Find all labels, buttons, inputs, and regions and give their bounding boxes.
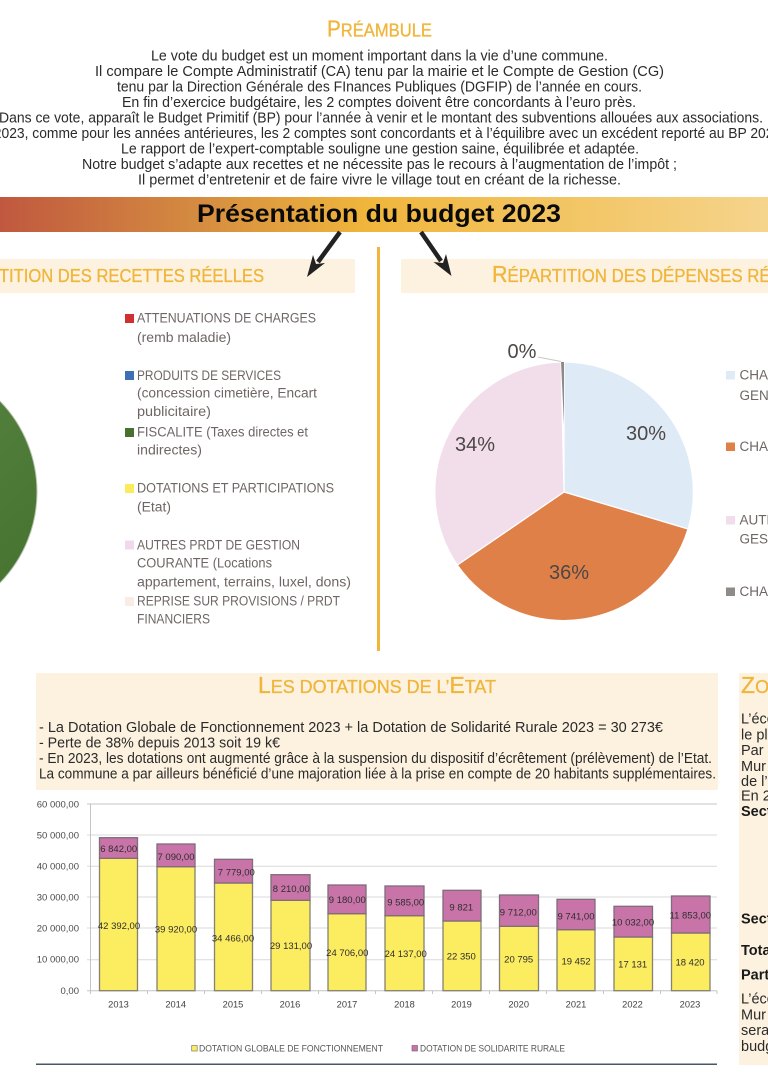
text block: préambule: Le rapport de l’expert-comptable souligne une gestion saine, équilibrée et adaptée. — [121, 140, 639, 158]
panel: zone (cropped right) — [739, 672, 768, 1065]
y axis and grid — [87, 804, 717, 994]
values: fonctionnement: 24 137,00 — [385, 949, 427, 960]
values: fonctionnement: 42 392,00 — [98, 921, 140, 932]
slice: 34% — [435, 362, 564, 565]
x axis labels: 2023 — [680, 1000, 700, 1010]
legend item: reprise sur provisions: REPRISE SUR PROVISIONS / PRDT — [137, 594, 340, 608]
banner: présentation du budget: Présentation du budget 2023 — [197, 200, 561, 228]
pie chart: recettes — [0, 362, 37, 622]
x axis labels: 2013 — [108, 1000, 129, 1010]
values: fonctionnement: 39 920,00 — [155, 925, 197, 936]
value: 36%: 36% — [549, 562, 589, 584]
chart legend: DOTATION DE SOLIDARITE RURALE — [420, 1043, 565, 1053]
legend item: reprise sur provisions: FINANCIERS — [137, 612, 210, 626]
legend item: produits de services: (concession cimetière, Encart — [137, 386, 317, 400]
bars: dotation globale de fonctionnement — [100, 858, 710, 991]
x axis labels: 2015 — [223, 1000, 243, 1010]
legend item: atténuations — [125, 310, 316, 345]
value: 30%: 30% — [626, 423, 666, 445]
slice: 0% — [561, 362, 564, 425]
values: fonctionnement: 17 131 — [618, 960, 647, 971]
y axis labels: 30 000,00 — [37, 892, 79, 904]
text block: dotations: - La Dotation Globale de Fonctionnement 2023 + la Dotation de Solidarité Rurale 2023 = 30 273€ — [39, 719, 664, 736]
x axis labels: 2014 — [165, 1000, 186, 1010]
bar chart: dotations 2013-2023 — [37, 800, 717, 1053]
panel: recettes heading — [0, 259, 355, 293]
y axis labels: 60 000,00 — [37, 800, 79, 810]
legend: dépenses — [726, 368, 768, 599]
text block: dotations — [39, 719, 716, 782]
text block: préambule — [0, 48, 768, 188]
text block: dotations: - En 2023, les dotations ont augmenté grâce à la suspension du dispositif d’écrêtement (prélèvement) de l’Etat. — [39, 750, 712, 767]
x axis labels: 2019 — [451, 1000, 472, 1010]
x axis labels: 2021 — [566, 1000, 586, 1010]
y axis labels: 40 000,00 — [37, 862, 79, 872]
values: fonctionnement: 18 420 — [675, 958, 705, 969]
banner: présentation du budget — [0, 197, 768, 232]
legend: recettes — [125, 310, 351, 626]
legend item: produits de services: publicitaire) — [137, 404, 211, 419]
legend item: dotations: (Etat) — [137, 500, 171, 514]
x axis labels — [108, 1000, 700, 1010]
pie chart: dépenses — [435, 341, 693, 620]
x axis labels: 2020 — [508, 1000, 529, 1010]
x axis labels: 2018 — [394, 1000, 415, 1010]
values: fonctionnement: 29 131,00 — [270, 941, 312, 952]
values: solidarité rurale — [100, 844, 711, 929]
chart legend: DOTATION GLOBALE DE FONCTIONNEMENT — [199, 1043, 383, 1053]
text block: préambule: tenu par la Direction Générale des FInances Publiques (DGFIP) de l’année en cours. — [117, 78, 642, 96]
values: solidarité rurale: 6 842,00 — [100, 844, 137, 855]
values: solidarité rurale: 7 779,00 — [218, 868, 255, 879]
values: solidarité rurale: 11 853,00 — [670, 910, 711, 921]
text block: préambule: En fin d’exercice budgétaire, les 2 comptes doivent être concordants à l’euro près. — [122, 94, 636, 111]
legend item: autres produits: AUTRES PRDT DE GESTION — [137, 538, 300, 552]
values: fonctionnement: 24 706,00 — [326, 948, 368, 959]
text block: préambule: Il permet d’entretenir et de faire vivre le village tout en créant de la richesse. — [138, 172, 621, 188]
x axis labels: 2022 — [622, 1000, 643, 1010]
x axis labels: 2016 — [280, 1000, 300, 1010]
values: solidarité rurale: 7 090,00 — [158, 852, 194, 863]
text block: préambule: Notre budget s’adapte aux recettes et ne nécessite pas le recours à l’augmentation de l’impôt ; — [82, 156, 677, 173]
legend item: autres produits: COURANTE (Locations — [137, 556, 272, 570]
values: solidarité rurale: 9 712,00 — [500, 907, 537, 918]
values: solidarité rurale: 10 032,00 — [612, 918, 654, 929]
heading: préambule: PRÉAMBULE — [327, 16, 432, 42]
value: 0%: 0% — [508, 341, 537, 363]
text block: zone: de l’ — [741, 774, 768, 790]
values: fonctionnement: 34 466,00 — [212, 933, 254, 944]
arrow: to recettes — [307, 232, 340, 277]
values: fonctionnement — [98, 921, 705, 971]
y axis labels: 20 000,00 — [37, 924, 79, 934]
bottom rule — [36, 1064, 717, 1065]
x axis labels: 2017 — [337, 1000, 357, 1010]
legend item: atténuations: ATTENUATIONS DE CHARGES — [137, 310, 316, 326]
y axis labels: 10 000,00 — [37, 954, 79, 966]
text block: zone: Mur — [741, 759, 766, 775]
vertical divider — [377, 247, 380, 651]
legend item: dotations: DOTATIONS ET PARTICIPATIONS — [137, 480, 334, 496]
legend item: autres produits — [125, 538, 351, 590]
value: 34%: 34% — [455, 434, 495, 456]
slice: 36% — [457, 492, 688, 620]
heading: les dotations: LES DOTATIONS DE L’ETAT — [258, 672, 496, 698]
values: fonctionnement: 19 452 — [561, 957, 591, 968]
text block: préambule: Il compare le Compte Administratif (CA) tenu par la mairie et le Compte de Gestion (CG) — [95, 63, 664, 80]
chart legend — [192, 1043, 565, 1053]
values: solidarité rurale: 9 180,00 — [329, 895, 366, 906]
text block: dotations: - Perte de 38% depuis 2013 soit 19 k€ — [39, 734, 281, 752]
legend item: autres produits: appartement, terrains, luxel, dons) — [137, 574, 351, 590]
text block: zone: Mur — [741, 1008, 766, 1024]
legend item: fiscalité: FISCALITE (Taxes directes et — [137, 424, 308, 440]
values: solidarité rurale: 9 585,00 — [387, 897, 424, 908]
bars: dotation de solidarité rurale — [100, 838, 710, 937]
values: solidarité rurale: 8 210,00 — [273, 884, 310, 895]
legend item: reprise sur provisions — [125, 594, 340, 626]
legend item: atténuations: (remb maladie) — [137, 330, 231, 345]
text block: zone: Par — [741, 743, 764, 759]
values: fonctionnement: 20 795 — [504, 954, 533, 965]
text block: dotations: La commune a par ailleurs bénéficié d’une majoration liée à la prise en compte de 20 habitants supplémentaires. — [39, 766, 716, 782]
leader line — [538, 357, 561, 362]
legend item: fiscalité — [125, 424, 308, 458]
y axis labels: 50 000,00 — [37, 830, 79, 842]
y axis labels: 0,00 — [60, 986, 79, 997]
text block: zone — [741, 712, 768, 1055]
values: solidarité rurale: 9 821 — [449, 903, 473, 914]
legend item: fiscalité: indirectes) — [137, 442, 202, 458]
values: solidarité rurale: 9 741,00 — [558, 911, 594, 922]
values: fonctionnement: 22 350 — [447, 951, 476, 962]
panel: les dotations de l'Etat — [36, 672, 718, 790]
slice: 30% — [564, 362, 693, 529]
legend item: produits de services: PRODUITS DE SERVICES — [137, 368, 281, 383]
y axis labels — [37, 800, 79, 997]
legend item: produits de services — [125, 368, 317, 419]
arrow: to dépenses — [421, 232, 452, 276]
text block: préambule: Le vote du budget est un moment important dans la vie d’une commune. — [151, 48, 608, 64]
legend item: dotations — [125, 480, 334, 514]
panel: dépenses heading — [401, 259, 768, 293]
